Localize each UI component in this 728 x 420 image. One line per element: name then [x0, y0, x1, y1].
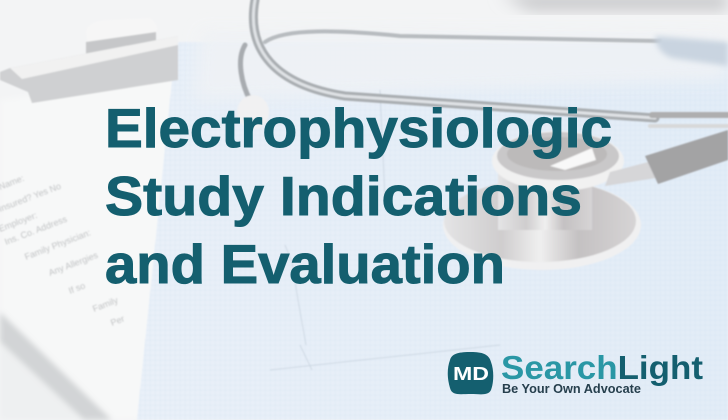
- handwritten form text: Any Allergies: [47, 250, 100, 278]
- ear tip ball: [237, 95, 269, 129]
- title: Study Indications: [105, 165, 582, 227]
- ECG paper: [137, 42, 728, 420]
- tagline: Be Your Own Advocate: [502, 381, 641, 396]
- handwritten form text: [0, 173, 126, 328]
- form sheet on clipboard: [0, 75, 182, 420]
- handwritten form text: Per: [109, 314, 126, 328]
- ECG trace: [270, 90, 500, 370]
- upper right headset piece: [655, 36, 728, 66]
- handwritten form text: Ins. Co. Address: [3, 214, 69, 247]
- title: [105, 97, 612, 295]
- clipboard clip: [0, 18, 178, 103]
- stethoscope chest piece: [443, 130, 728, 270]
- title: Electrophysiologic: [105, 97, 612, 159]
- stethoscope tubing: [241, 0, 728, 126]
- tube connector and dark tube: [605, 160, 656, 186]
- top-right blurred shadow: [500, 0, 728, 10]
- logo: MD SearchLight: [448, 349, 703, 396]
- handwritten form text: Family: [91, 295, 120, 314]
- logo badge: MD: [453, 364, 489, 384]
- title: and Evaluation: [105, 233, 505, 295]
- handwritten form text: Family Physician:: [23, 227, 92, 262]
- wordmark: SearchLight: [501, 349, 703, 386]
- handwritten form text: If so: [67, 280, 87, 296]
- logo badge: [448, 352, 493, 394]
- soft upper paper highlight: [195, 30, 728, 100]
